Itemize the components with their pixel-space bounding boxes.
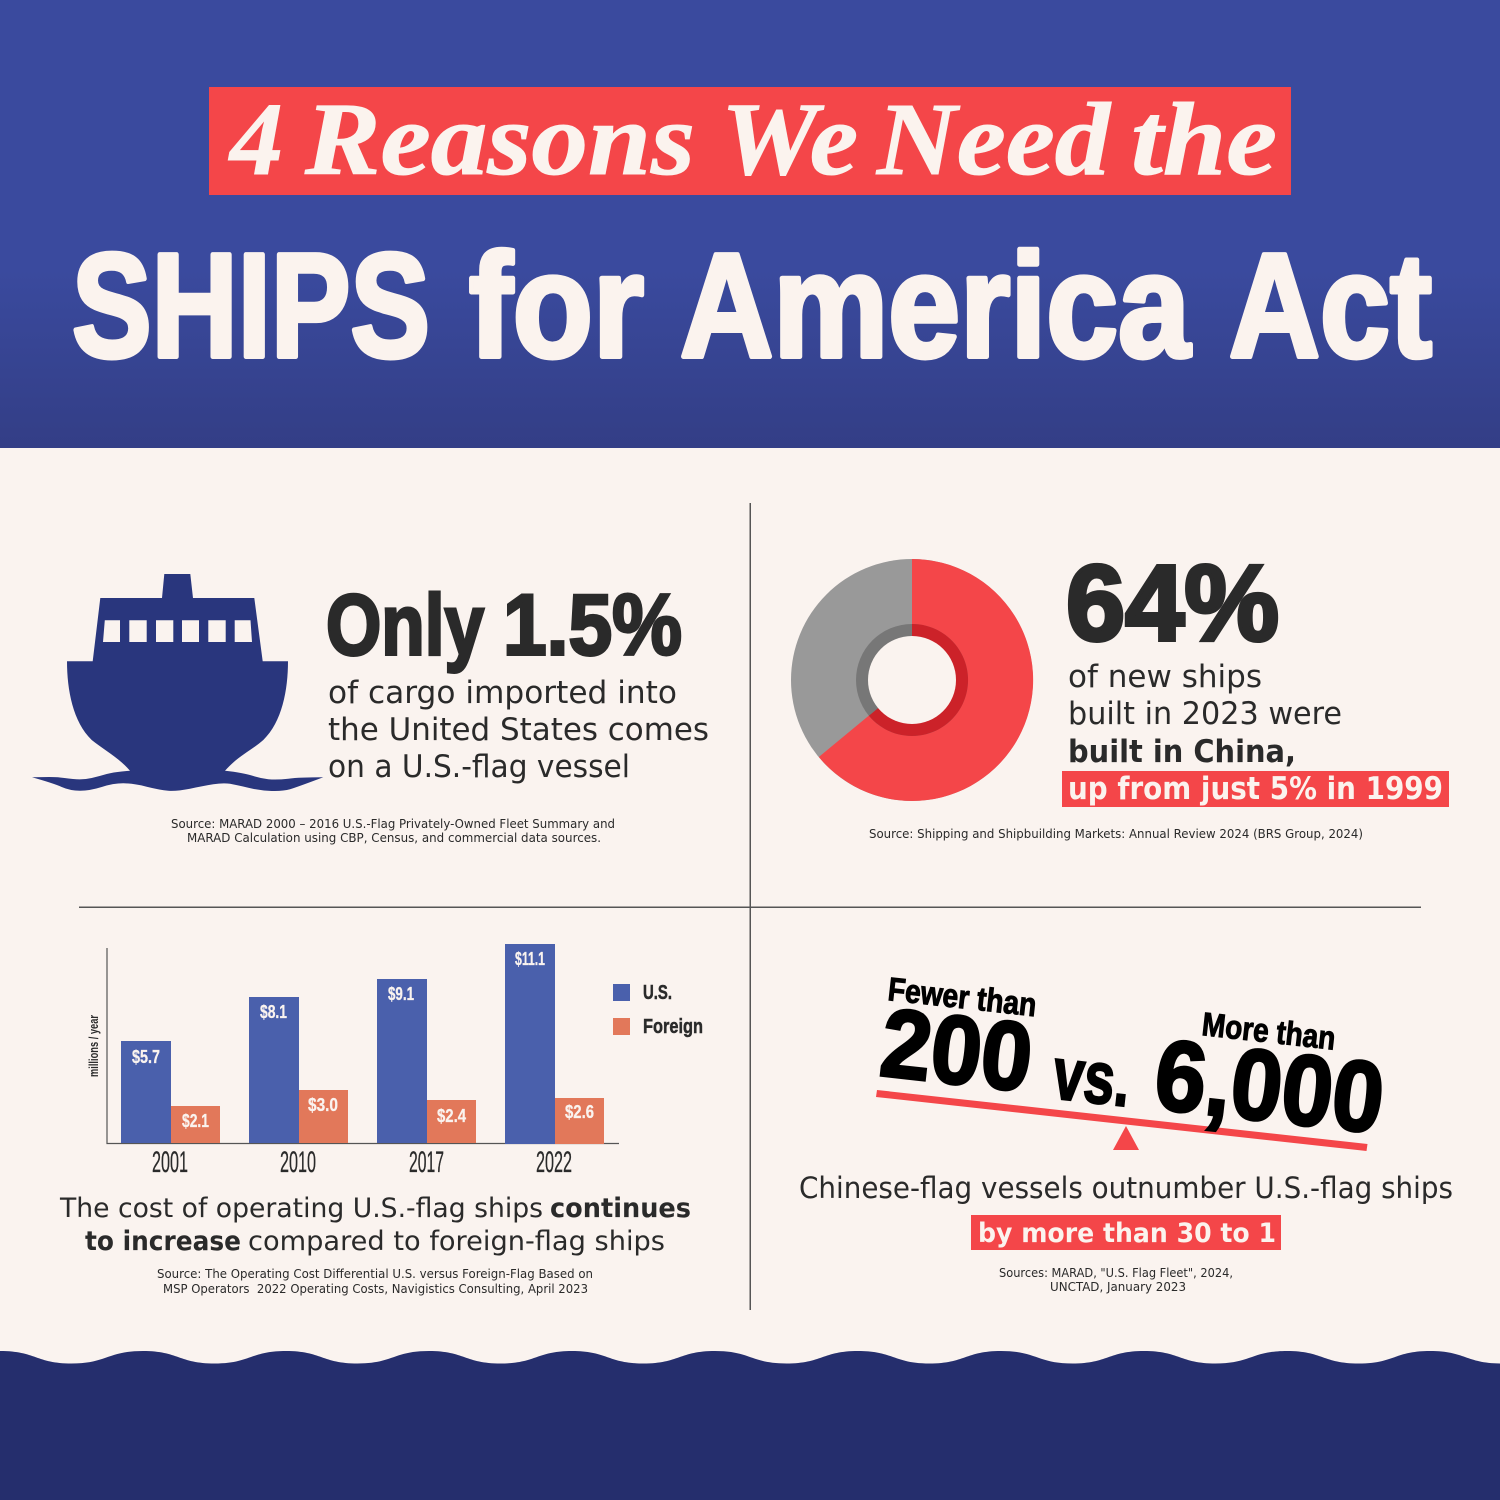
bars 2001: 2001	[152, 1146, 188, 1179]
source	[171, 817, 615, 845]
bar chart	[86, 944, 703, 1179]
title line 2: America	[680, 224, 1191, 388]
number: 200: 200	[876, 988, 1038, 1112]
china description	[1068, 659, 1342, 770]
cost description: continues	[550, 1193, 691, 1224]
bars 2001: $2.1	[182, 1111, 209, 1131]
stat: only 1.5%	[326, 578, 682, 674]
title line 1: Reasons	[304, 82, 695, 197]
source: Source: The Operating Cost Differential U.S. versus Foreign-Flag Based on	[157, 1267, 593, 1281]
source: Source: MARAD 2000 – 2016 U.S.-Flag Privately-Owned Fleet Summary and	[171, 817, 615, 831]
bars 2022: $11.1	[515, 949, 545, 969]
stat: only 1.5%: Only	[326, 578, 484, 674]
label: more than: More than	[1200, 1005, 1337, 1057]
source: MARAD Calculation using CBP, Census, and commercial data sources.	[187, 831, 601, 845]
horizontal divider	[79, 906, 1421, 908]
legend: Foreign	[643, 1016, 703, 1038]
bars 2017: $2.4	[437, 1106, 466, 1126]
cost description: to increase	[85, 1226, 241, 1257]
cost description: The cost of operating U.S.-flag ships	[59, 1193, 543, 1224]
seesaw beam	[876, 1090, 1368, 1151]
source: Sources: MARAD, "U.S. Flag Fleet", 2024,	[999, 1266, 1233, 1280]
source	[157, 1267, 593, 1296]
stat: only 1.5%: 1.5%	[503, 578, 682, 674]
cost description	[59, 1193, 691, 1257]
bars 2017: $9.1	[388, 984, 414, 1004]
icon: ship	[32, 574, 323, 791]
cargo description: on a U.S.-flag vessel	[328, 749, 630, 785]
title line 2: for	[469, 224, 644, 388]
title line 2: Act	[1229, 224, 1432, 388]
cargo description	[328, 675, 709, 785]
title line 2: SHIPS	[72, 224, 430, 388]
panel: cargo share	[32, 574, 709, 845]
bars 2001: $5.7	[132, 1047, 160, 1067]
bars 2010: 2010	[280, 1146, 316, 1179]
source: UNCTAD, January 2023	[1050, 1280, 1186, 1294]
bars 2010	[249, 997, 348, 1179]
number: 6,000: 6,000	[1150, 1019, 1389, 1155]
title line 1: the	[1131, 82, 1277, 197]
legend	[613, 982, 703, 1038]
highlight callout: up from just 5% in 1999	[1068, 771, 1443, 807]
cargo description: of cargo imported into	[328, 675, 677, 711]
china description: of new ships	[1068, 659, 1262, 695]
stat: 64%: 64%	[1066, 542, 1279, 663]
bars 2010: $3.0	[308, 1095, 338, 1115]
vertical divider	[750, 503, 751, 1310]
footer wave	[0, 1351, 1500, 1500]
bars 2022: 2022	[536, 1146, 572, 1179]
china description: built in China,	[1068, 734, 1296, 770]
highlight callout: by more than 30 to 1	[978, 1218, 1276, 1249]
panel: operating cost	[59, 944, 703, 1296]
bars 2022: $2.6	[565, 1102, 594, 1122]
bars 2017: 2017	[409, 1146, 444, 1179]
donut chart	[791, 559, 1033, 801]
title line 1: We	[721, 82, 858, 197]
title line 1	[209, 82, 1291, 197]
axes	[107, 948, 619, 1144]
source: Source: Shipping and Shipbuilding Markets: Annual Review 2024 (BRS Group, 2024)	[869, 827, 1363, 841]
seesaw fulcrum	[1113, 1126, 1139, 1150]
bars 2010: $8.1	[260, 1002, 287, 1022]
comparison description: Chinese-flag vessels outnumber U.S.-flag ships	[799, 1171, 1453, 1205]
bars 2001	[121, 1041, 220, 1179]
panel: china shipbuilding	[791, 542, 1449, 841]
y axis label: millions / year	[86, 1015, 101, 1077]
bars 2017	[377, 979, 476, 1179]
title line 1: 4	[228, 82, 283, 197]
title line 1: Need	[876, 82, 1112, 197]
header banner	[0, 0, 1500, 448]
cargo description: the United States comes	[328, 712, 709, 748]
panel: fleet comparison	[799, 970, 1453, 1294]
label: vs: vs.	[1049, 1031, 1135, 1122]
source	[999, 1266, 1233, 1294]
source: MSP Operators 2022 Operating Costs, Navigistics Consulting, April 2023	[163, 1282, 588, 1296]
legend: U.S.	[643, 982, 672, 1004]
china description: built in 2023 were	[1068, 696, 1342, 732]
bars 2022	[505, 944, 604, 1179]
seesaw graphic	[876, 970, 1389, 1155]
label: fewer than: Fewer than	[886, 970, 1038, 1023]
cost description: compared to foreign-flag ships	[248, 1226, 665, 1257]
title line 2	[72, 224, 1432, 388]
